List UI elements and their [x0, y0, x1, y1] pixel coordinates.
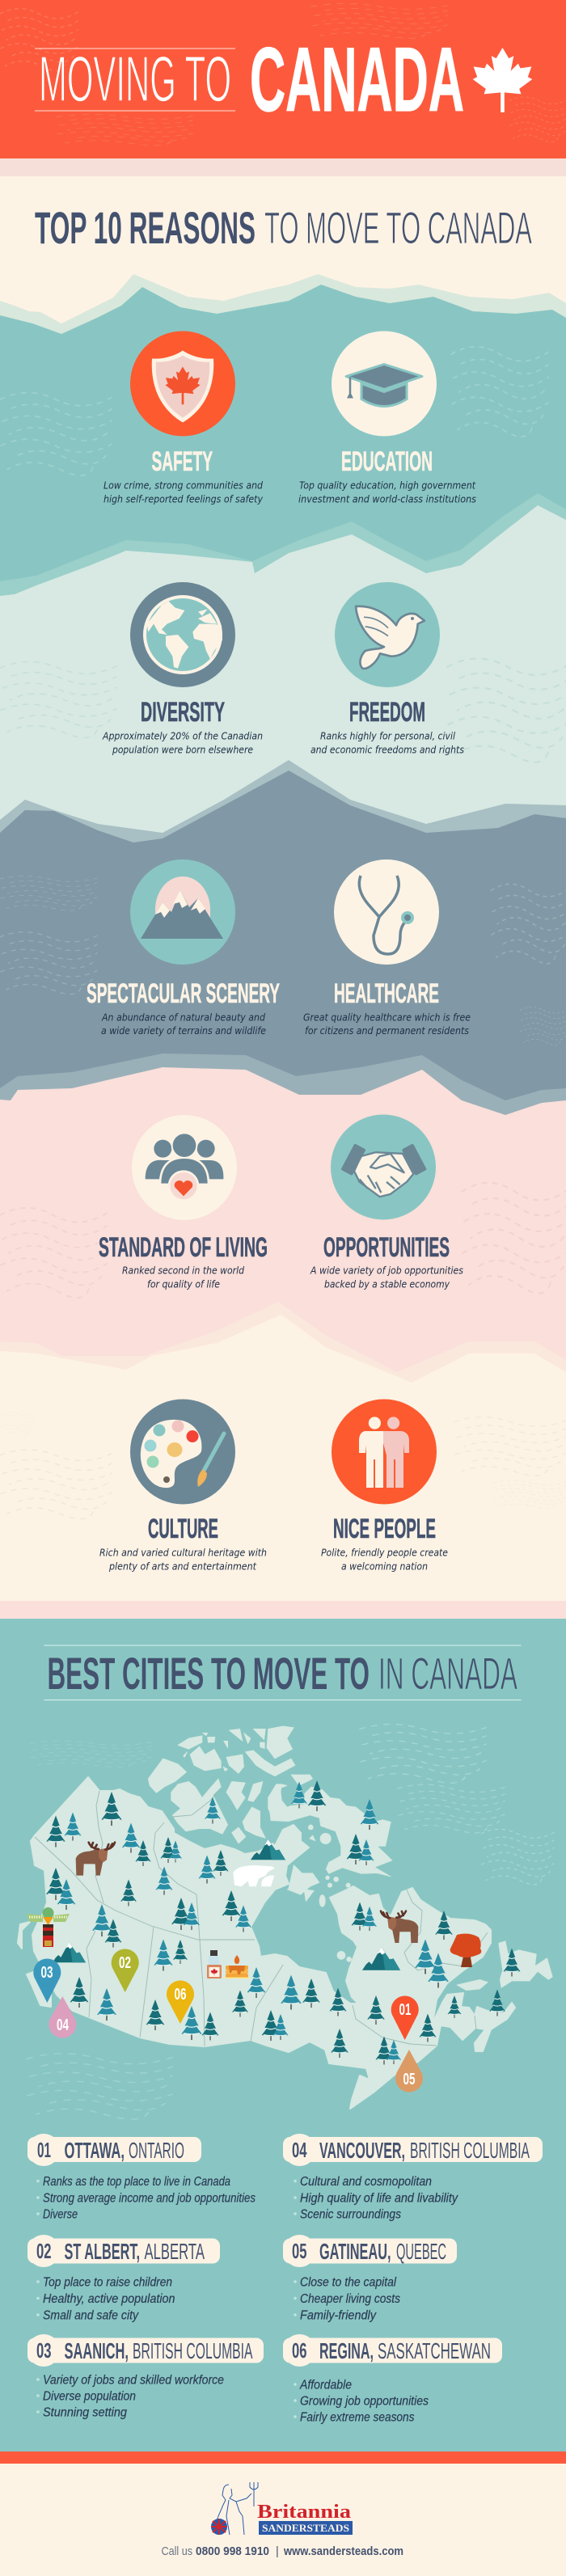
city: Regina: Growing job opportunities [300, 2395, 429, 2408]
city: St Albert [27, 2235, 220, 2322]
icon: pancakes [224, 1955, 250, 1978]
city: Vancouver: Cultural and cosmopolitan [300, 2175, 432, 2189]
panel: diversity: population were born elsewhere [112, 744, 253, 755]
icon: people with heart [132, 1115, 237, 1220]
panel: spectacular scenery: a wide variety of terrains and wildlife [101, 1024, 266, 1037]
icon: two friends [332, 1399, 437, 1504]
icon: graduation cap [332, 332, 437, 437]
city: Gatineau: Close to the capital [300, 2275, 396, 2290]
map of Canada [18, 1725, 554, 2119]
city: Gatineau [283, 2235, 457, 2322]
city: St Albert: Small and safe city [43, 2309, 139, 2322]
map pin 05: 05 [403, 2071, 416, 2088]
icon: dove [335, 582, 440, 687]
panel: healthcare: Great quality healthcare which is free [303, 1011, 471, 1024]
panel: standard of living: STANDARD OF LIVING [99, 1232, 268, 1263]
city: Regina [283, 2334, 502, 2424]
panel: safety [103, 332, 264, 505]
panel: education: EDUCATION [341, 446, 433, 477]
icon: Britannia figure [212, 2482, 258, 2535]
city: Vancouver: 04 [292, 2138, 307, 2162]
panel: standard of living: for quality of life [147, 1277, 220, 1290]
title [35, 29, 464, 130]
logo: Britannia Sandersteads: Britannia [257, 2502, 351, 2523]
city: Ottawa: 01 [37, 2138, 51, 2162]
logo: Britannia Sandersteads [212, 2482, 353, 2535]
city: Vancouver: VANCOUVER, [319, 2138, 405, 2163]
city: Saanich: 03 [36, 2338, 52, 2363]
panel: spectacular scenery: SPECTACULAR SCENERY [87, 978, 280, 1009]
city: Gatineau: Cheaper living costs [300, 2292, 400, 2306]
map pin 02: 02 [119, 1954, 131, 1972]
panel: opportunities: A wide variety of job opportunities [310, 1265, 463, 1276]
city: St Albert: Healthy, active population [43, 2292, 175, 2306]
city: Regina: REGINA, [319, 2338, 374, 2363]
map pin 03: 03 [40, 1964, 53, 1982]
city: Gatineau: QUEBEC [396, 2239, 446, 2264]
logo: Britannia Sandersteads: SANDERSTEADS [262, 2522, 349, 2534]
icon: moose west [76, 1843, 115, 1876]
map pin 06: 06 [175, 1986, 186, 2004]
contact line: 0800 998 1910 [196, 2545, 269, 2558]
icon: autumn tree [450, 1934, 481, 1967]
panel: opportunities [310, 1114, 463, 1290]
panel: nice people: Polite, friendly people create [321, 1546, 448, 1559]
panel: safety: Low crime, strong communities and [103, 479, 263, 492]
contact line: | [276, 2545, 279, 2558]
icon: polar bears [233, 1865, 275, 1886]
panel: education: Top quality education, high government [299, 479, 476, 492]
city: Vancouver [283, 2134, 543, 2222]
city: Ottawa: Ranks as the top place to live in Canada [43, 2175, 230, 2189]
icon: mountains [130, 859, 235, 965]
panel: nice people [321, 1399, 448, 1572]
contact line: www.sandersteads.com [283, 2545, 403, 2558]
panel: opportunities: OPPORTUNITIES [323, 1232, 450, 1263]
panel: education: investment and world-class institutions [298, 493, 476, 505]
panel: safety: SAFETY [152, 446, 213, 477]
city: Regina: Affordable [299, 2379, 352, 2392]
panel: spectacular scenery [87, 859, 280, 1037]
map pin 03 [33, 1958, 61, 2003]
city: Vancouver: High quality of life and livability [300, 2191, 458, 2206]
panel: safety: high self-reported feelings of safety [103, 493, 264, 505]
city: Regina: 06 [292, 2338, 307, 2363]
city: Regina: Fairly extreme seasons [300, 2411, 414, 2424]
city: Ottawa: Strong average income and job opportunities [43, 2191, 256, 2206]
icon: maple syrup bottle [207, 1950, 222, 1978]
map pin 04: 04 [57, 2016, 70, 2034]
panel: freedom: Ranks highly for personal, civil [320, 729, 455, 742]
map pin 05 [395, 2050, 423, 2092]
city: Saanich: SAANICH, [65, 2338, 129, 2363]
city: St Albert: Top place to raise children [43, 2275, 172, 2290]
city: Saanich: Variety of jobs and skilled workforce [43, 2374, 224, 2387]
panel: diversity: DIVERSITY [141, 697, 225, 728]
panel: healthcare: for citizens and permanent residents [305, 1024, 469, 1037]
city: St Albert: ST ALBERT, [65, 2239, 140, 2264]
city: St Albert: 02 [36, 2239, 52, 2263]
map pin 01 [391, 1995, 419, 2040]
map pin 04 [49, 1996, 76, 2038]
trees [46, 1780, 521, 2065]
icon: handshake [331, 1114, 436, 1219]
icon: maple leaf [473, 48, 532, 112]
city: St Albert: ALBERTA [144, 2239, 205, 2264]
panel: education [298, 332, 476, 505]
city: Gatineau: GATINEAU, [319, 2239, 391, 2264]
panel: opportunities: backed by a stable economy [324, 1277, 450, 1290]
header banner [0, 0, 566, 176]
map landmass [18, 1726, 552, 2109]
city: Regina: SASKATCHEWAN [378, 2338, 491, 2363]
city: Vancouver: Scenic surroundings [300, 2207, 401, 2222]
panel: freedom: FREEDOM [349, 697, 425, 728]
snowy mountains [53, 1839, 400, 1970]
icon: palette and brush [130, 1399, 235, 1504]
city: Saanich: Stunning setting [43, 2406, 127, 2419]
panel: culture: CULTURE [148, 1514, 218, 1544]
panel: freedom [310, 582, 464, 755]
city: Saanich: BRITISH COLUMBIA [133, 2338, 253, 2363]
panel: standard of living: Ranked second in the world [122, 1265, 244, 1276]
icon: globe [130, 582, 235, 687]
panel: nice people: NICE PEOPLE [333, 1514, 436, 1544]
icon: shield with maple leaf [130, 332, 235, 437]
icon: totem pole [26, 1907, 70, 1947]
panel: diversity [102, 582, 263, 755]
panel: diversity: Approximately 20% of the Canadian [102, 729, 263, 742]
city: Ottawa: OTTAWA, [65, 2138, 125, 2163]
panel: standard of living [99, 1115, 268, 1290]
panel: spectacular scenery: An abundance of natural beauty and [101, 1011, 265, 1024]
panel: healthcare: HEALTHCARE [334, 978, 439, 1009]
icon: stethoscope [334, 859, 439, 965]
city: Ottawa [27, 2134, 256, 2222]
panel: healthcare [303, 859, 471, 1037]
city: Saanich: Diverse population [43, 2390, 136, 2403]
panel: nice people: a welcoming nation [341, 1560, 428, 1572]
map pin 01: 01 [399, 2001, 411, 2019]
panel: freedom: and economic freedoms and rights [310, 744, 464, 755]
map pin 06 [167, 1980, 194, 2024]
contact line: Call us [162, 2545, 192, 2558]
title: MOVING TO [39, 43, 231, 115]
map pin 02 [112, 1949, 139, 1992]
province borders [35, 1791, 488, 2046]
city: Saanich [27, 2334, 264, 2419]
contact line [162, 2545, 403, 2558]
city: Ottawa: Diverse [43, 2207, 78, 2222]
city: Gatineau: 05 [292, 2239, 307, 2263]
panel: culture: plenty of arts and entertainment [108, 1560, 257, 1572]
icon: moose east [381, 1911, 418, 1943]
panel: culture: Rich and varied cultural heritage with [99, 1546, 267, 1559]
city: Gatineau: Family-friendly [300, 2309, 377, 2322]
city: Ottawa: ONTARIO [129, 2138, 184, 2163]
panel: culture [99, 1399, 267, 1572]
heading: top 10 reasons: TOP 10 REASONS [35, 202, 256, 253]
